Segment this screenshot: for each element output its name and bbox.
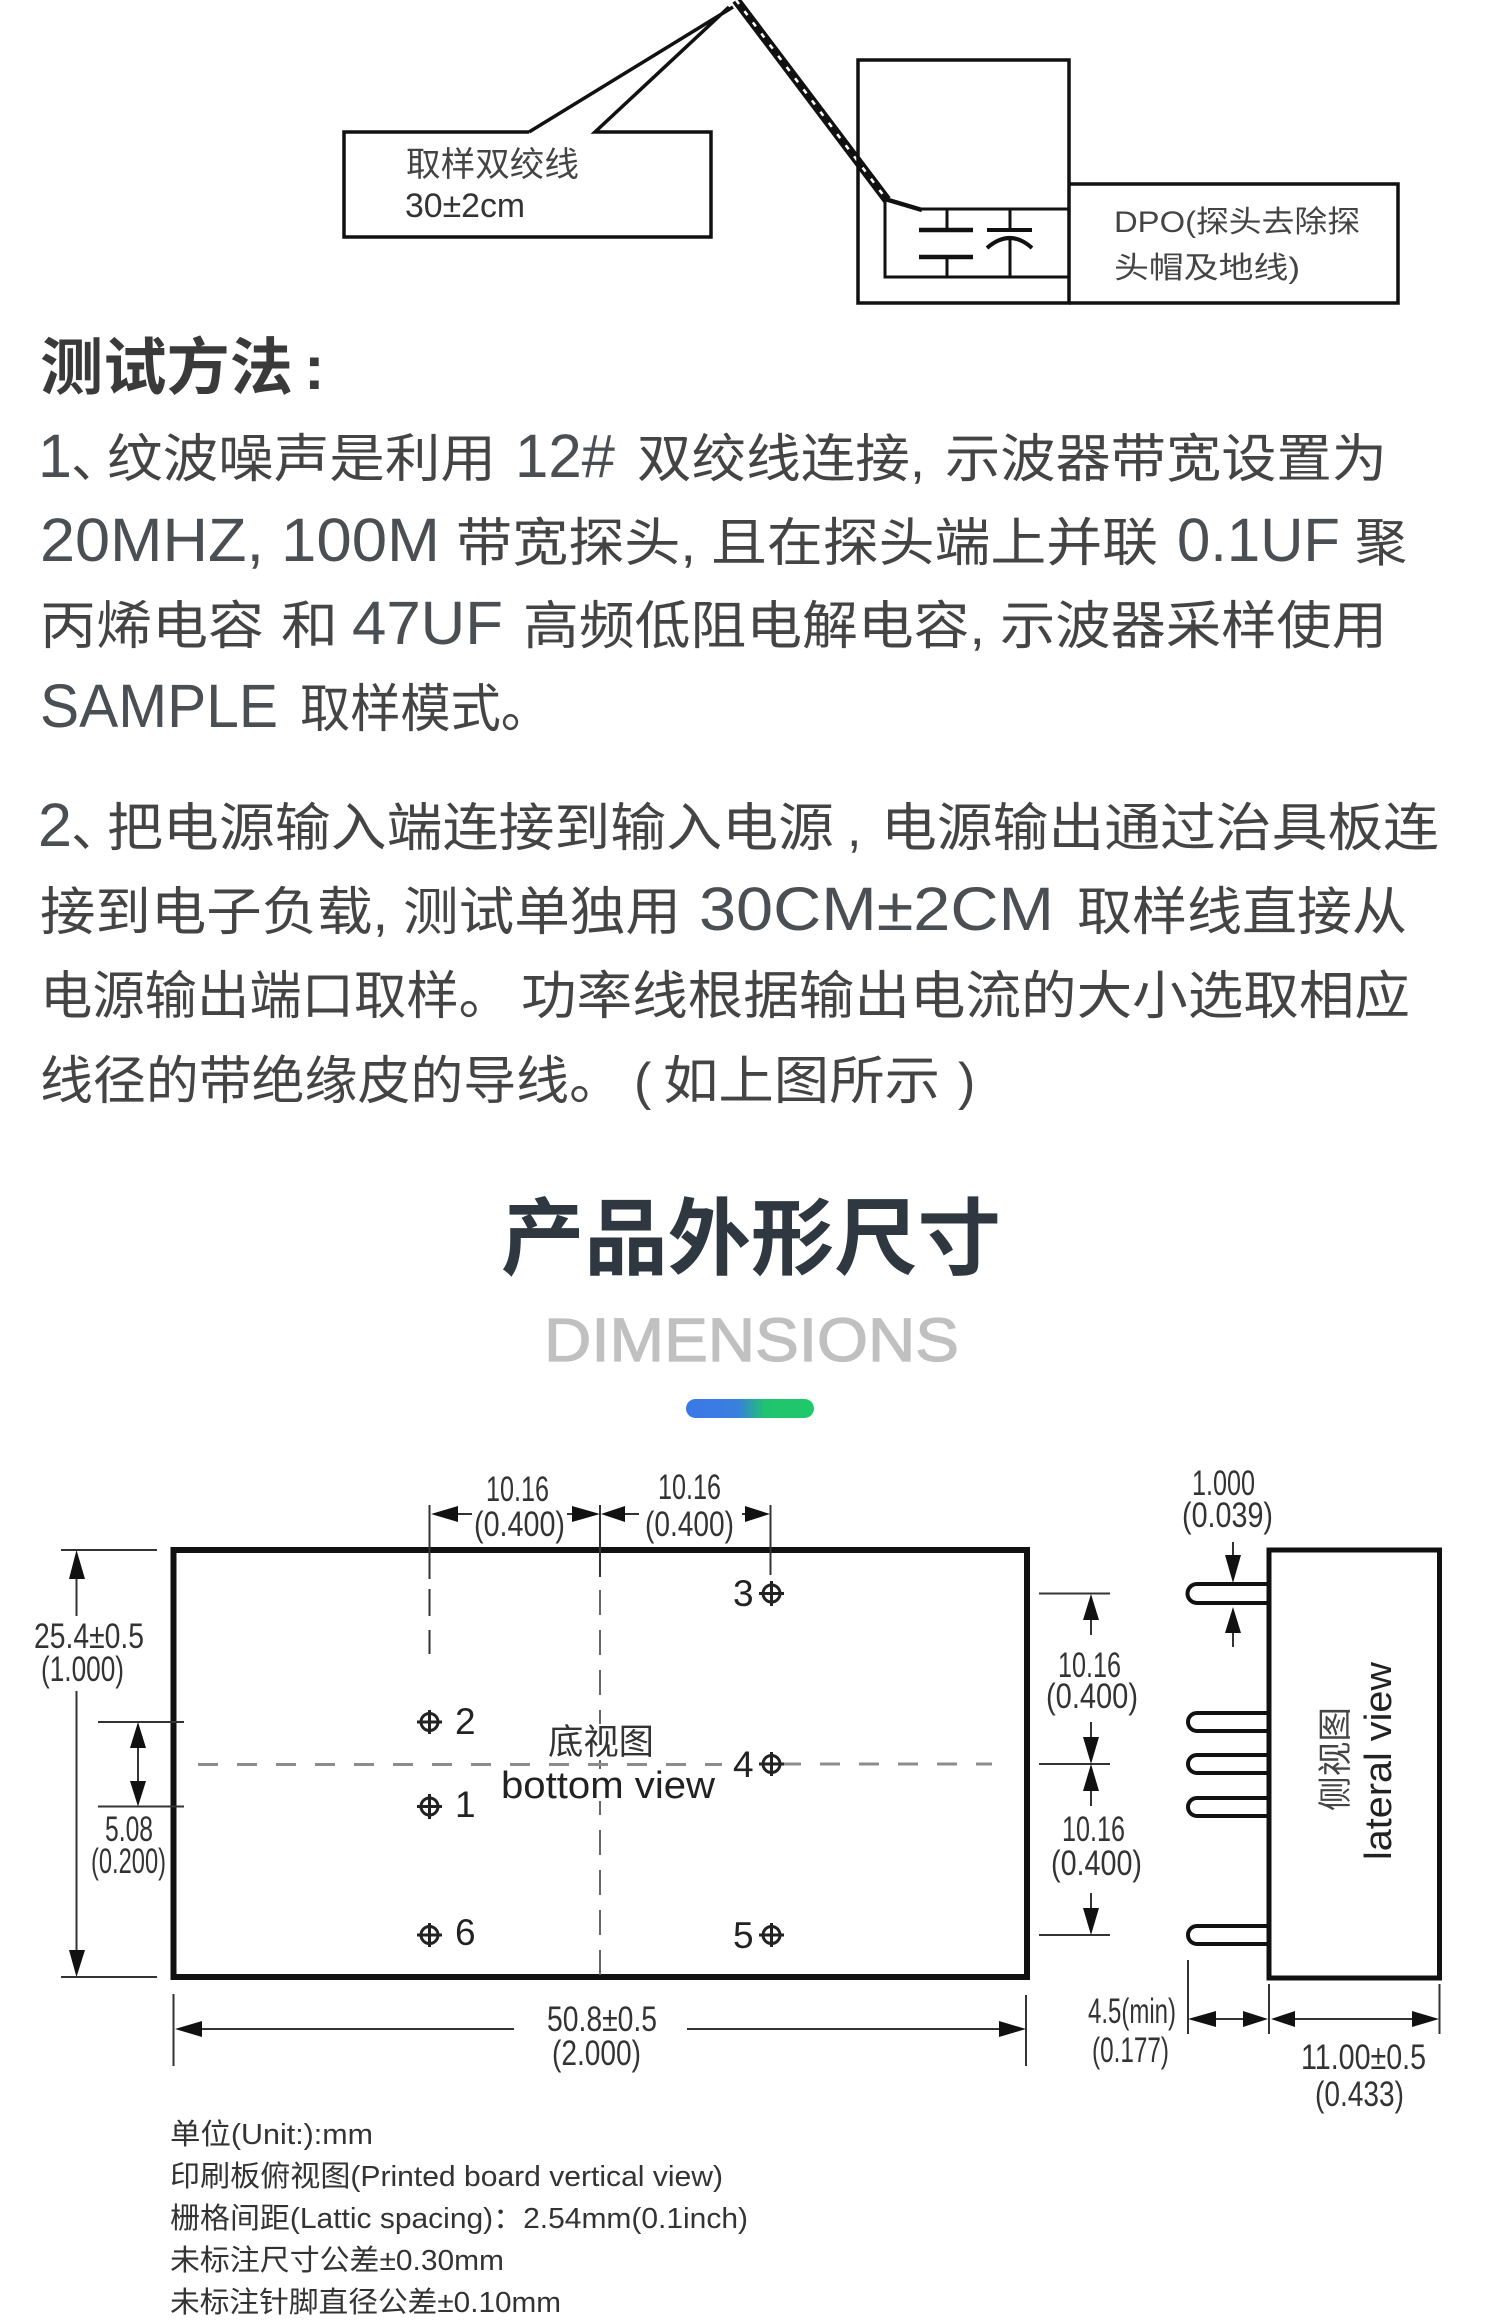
text block: method paragraph 2: 测试单独用 <box>403 884 681 942</box>
pin diameter dimension: (0.039) <box>1182 1496 1273 1535</box>
text block: method paragraph 1: 47UF <box>352 589 503 657</box>
callout: sampling twisted pair <box>344 7 733 237</box>
pin numbers: 2 <box>455 1701 476 1742</box>
text block: method paragraph 1: 纹波噪声是利用 <box>107 431 496 489</box>
pin markers <box>417 1581 784 1947</box>
top dimension labels: 10.16 <box>658 1468 721 1507</box>
pins <box>1188 1584 1269 1944</box>
pin numbers: 6 <box>455 1912 476 1953</box>
capacitor symbols <box>919 209 1032 277</box>
width dimension <box>174 1994 1026 2073</box>
text block: method paragraph 1: 高频低阻电解电容, <box>523 598 985 656</box>
pin numbers <box>455 1573 754 1956</box>
text block: method paragraph 1 <box>38 422 1407 740</box>
heading: test method: 测试方法 <box>40 334 293 403</box>
pin numbers: 3 <box>733 1573 754 1614</box>
text block: method paragraph 2: ) <box>958 1053 975 1111</box>
module outline <box>174 1550 1027 1977</box>
text block: dimension notes: 栅格间距(Lattic spacing)：2.54mm(0.1inch) <box>170 2202 748 2235</box>
text block: method paragraph 1: 和 <box>281 598 338 656</box>
text block: method paragraph 1: 12# <box>515 422 615 490</box>
text block: method paragraph 1: 100M <box>281 506 440 574</box>
height dimension: (1.000) <box>41 1650 124 1689</box>
width dimension: 50.8±0.5 <box>547 2000 657 2039</box>
pin length and body depth dimensions: (0.433) <box>1315 2075 1404 2114</box>
view label: lateral view: 侧视图 <box>1317 1707 1355 1811</box>
pin pitch dimension: (0.200) <box>91 1842 166 1881</box>
callout: DPO probe note: DPO(探头去除探 <box>1114 206 1360 239</box>
text block: dimension notes: 单位(Unit:):mm <box>170 2118 373 2151</box>
pin pitch dimension <box>91 1722 184 1881</box>
pin length and body depth dimensions: (0.177) <box>1092 2031 1169 2070</box>
pin numbers: 1 <box>455 1784 476 1825</box>
text block: method paragraph 1: 示波器采样使用 <box>1000 598 1387 656</box>
top dimension labels: (0.400) <box>474 1505 565 1544</box>
top dimension labels <box>474 1468 734 1544</box>
heading: test method: : <box>304 334 325 403</box>
top dimension labels: 10.16 <box>486 1470 549 1509</box>
pin spacing dimension right: 10.16 <box>1058 1646 1121 1685</box>
callout: DPO probe note: 头帽及地线) <box>1114 252 1300 285</box>
twisted wire <box>736 0 922 210</box>
text block: dimension notes: 未标注尺寸公差±0.30mm <box>170 2244 504 2277</box>
view label: lateral view: lateral view <box>1358 1661 1400 1860</box>
text block: method paragraph 1: 且在探头端上并联 <box>711 515 1158 573</box>
section subtitle: DIMENSIONS: DIMENSIONS <box>544 1306 959 1374</box>
center lines <box>198 1505 992 1977</box>
text block: method paragraph 1: 带宽探头, <box>456 515 696 573</box>
text block: method paragraph 1: 1 <box>38 422 72 490</box>
text block: method paragraph 2: 功率线根据输出电流的大小选取相应 <box>521 968 1410 1026</box>
pin diameter dimension: 1.000 <box>1192 1464 1255 1503</box>
text block: method paragraph 1: 、 <box>71 431 123 489</box>
height dimension <box>34 1550 157 1977</box>
panel: test circuit diagram <box>344 0 1398 303</box>
pin numbers: 4 <box>733 1744 754 1785</box>
text block: method paragraph 2: 电源输出端口取样。 <box>40 968 511 1026</box>
view label: bottom view <box>501 1723 716 1807</box>
text block: method paragraph 1: 20MHZ, <box>40 506 264 574</box>
chart: lateral view drawing <box>1088 1464 1440 2114</box>
height dimension: 25.4±0.5 <box>34 1617 144 1656</box>
pin spacing dimension right <box>1039 1594 1142 1935</box>
text block: method paragraph 1: 聚 <box>1355 515 1407 573</box>
pin spacing dimension right: (0.400) <box>1046 1677 1138 1716</box>
text block: method paragraph 2: 、 <box>71 800 123 858</box>
text block: method paragraph 2: 2 <box>38 791 72 859</box>
view label: lateral view <box>1317 1661 1400 1860</box>
section title: 产品外形尺寸: 产品外形尺寸 <box>501 1192 1001 1286</box>
text block: dimension notes: 印刷板俯视图(Printed board vertical view) <box>170 2160 723 2193</box>
pin length and body depth dimensions <box>1088 1960 1440 2114</box>
text block: method paragraph 2: 线径的带绝缘皮的导线。 <box>40 1053 622 1111</box>
pin length and body depth dimensions: 4.5(min) <box>1088 1992 1176 2031</box>
top dimension arrows <box>431 1506 770 1522</box>
text block: dimension notes <box>170 2118 748 2319</box>
text block: method paragraph 2: 30CM±2CM <box>699 875 1054 943</box>
text block: method paragraph 1: 取样模式。 <box>300 681 551 739</box>
text block: method paragraph 2: 电源输出通过治具板连 <box>881 800 1439 858</box>
pin pitch dimension: 5.08 <box>105 1810 153 1849</box>
view label: bottom view: bottom view <box>501 1765 716 1807</box>
pin diameter dimension <box>1182 1464 1273 1647</box>
text block: method paragraph 1: 丙烯电容 <box>40 598 264 656</box>
text block: method paragraph 2: 把电源输入端连接到输入电源 <box>107 800 834 858</box>
text block: method paragraph 2: 取样线直接从 <box>1077 884 1407 942</box>
module side outline <box>1269 1550 1440 1978</box>
text block: method paragraph 1: 示波器带宽设置为 <box>945 431 1387 489</box>
width dimension: (2.000) <box>552 2034 641 2073</box>
text block: method paragraph 1: 0.1UF <box>1177 506 1340 574</box>
text block: method paragraph 1: 双绞线连接, <box>637 431 925 489</box>
pin spacing dimension right: (0.400) <box>1051 1844 1142 1883</box>
text block: method paragraph 2: , <box>847 800 861 858</box>
text block: method paragraph 2: 如上图所示 <box>663 1053 940 1111</box>
chart: bottom view drawing <box>34 1468 1142 2073</box>
text block: method paragraph 2 <box>38 791 1439 1111</box>
callout: sampling twisted pair: 取样双绞线 <box>406 146 579 184</box>
view label: bottom view: 底视图 <box>548 1723 654 1762</box>
accent bar <box>686 1399 814 1418</box>
callout: DPO probe note <box>1069 184 1398 303</box>
pin numbers: 5 <box>733 1915 754 1956</box>
callout: sampling twisted pair: 30±2cm <box>405 187 525 225</box>
text block: dimension notes: 未标注针脚直径公差±0.10mm <box>170 2286 561 2319</box>
oscilloscope probe box <box>858 60 1069 303</box>
text block: method paragraph 1: SAMPLE <box>40 672 278 740</box>
top dimension labels: (0.400) <box>645 1505 734 1544</box>
text block: method paragraph 2: 接到电子负载, <box>40 884 388 942</box>
pin length and body depth dimensions: 11.00±0.5 <box>1301 2038 1426 2077</box>
text block: method paragraph 2: ( <box>634 1053 652 1111</box>
pin spacing dimension right: 10.16 <box>1062 1810 1125 1849</box>
